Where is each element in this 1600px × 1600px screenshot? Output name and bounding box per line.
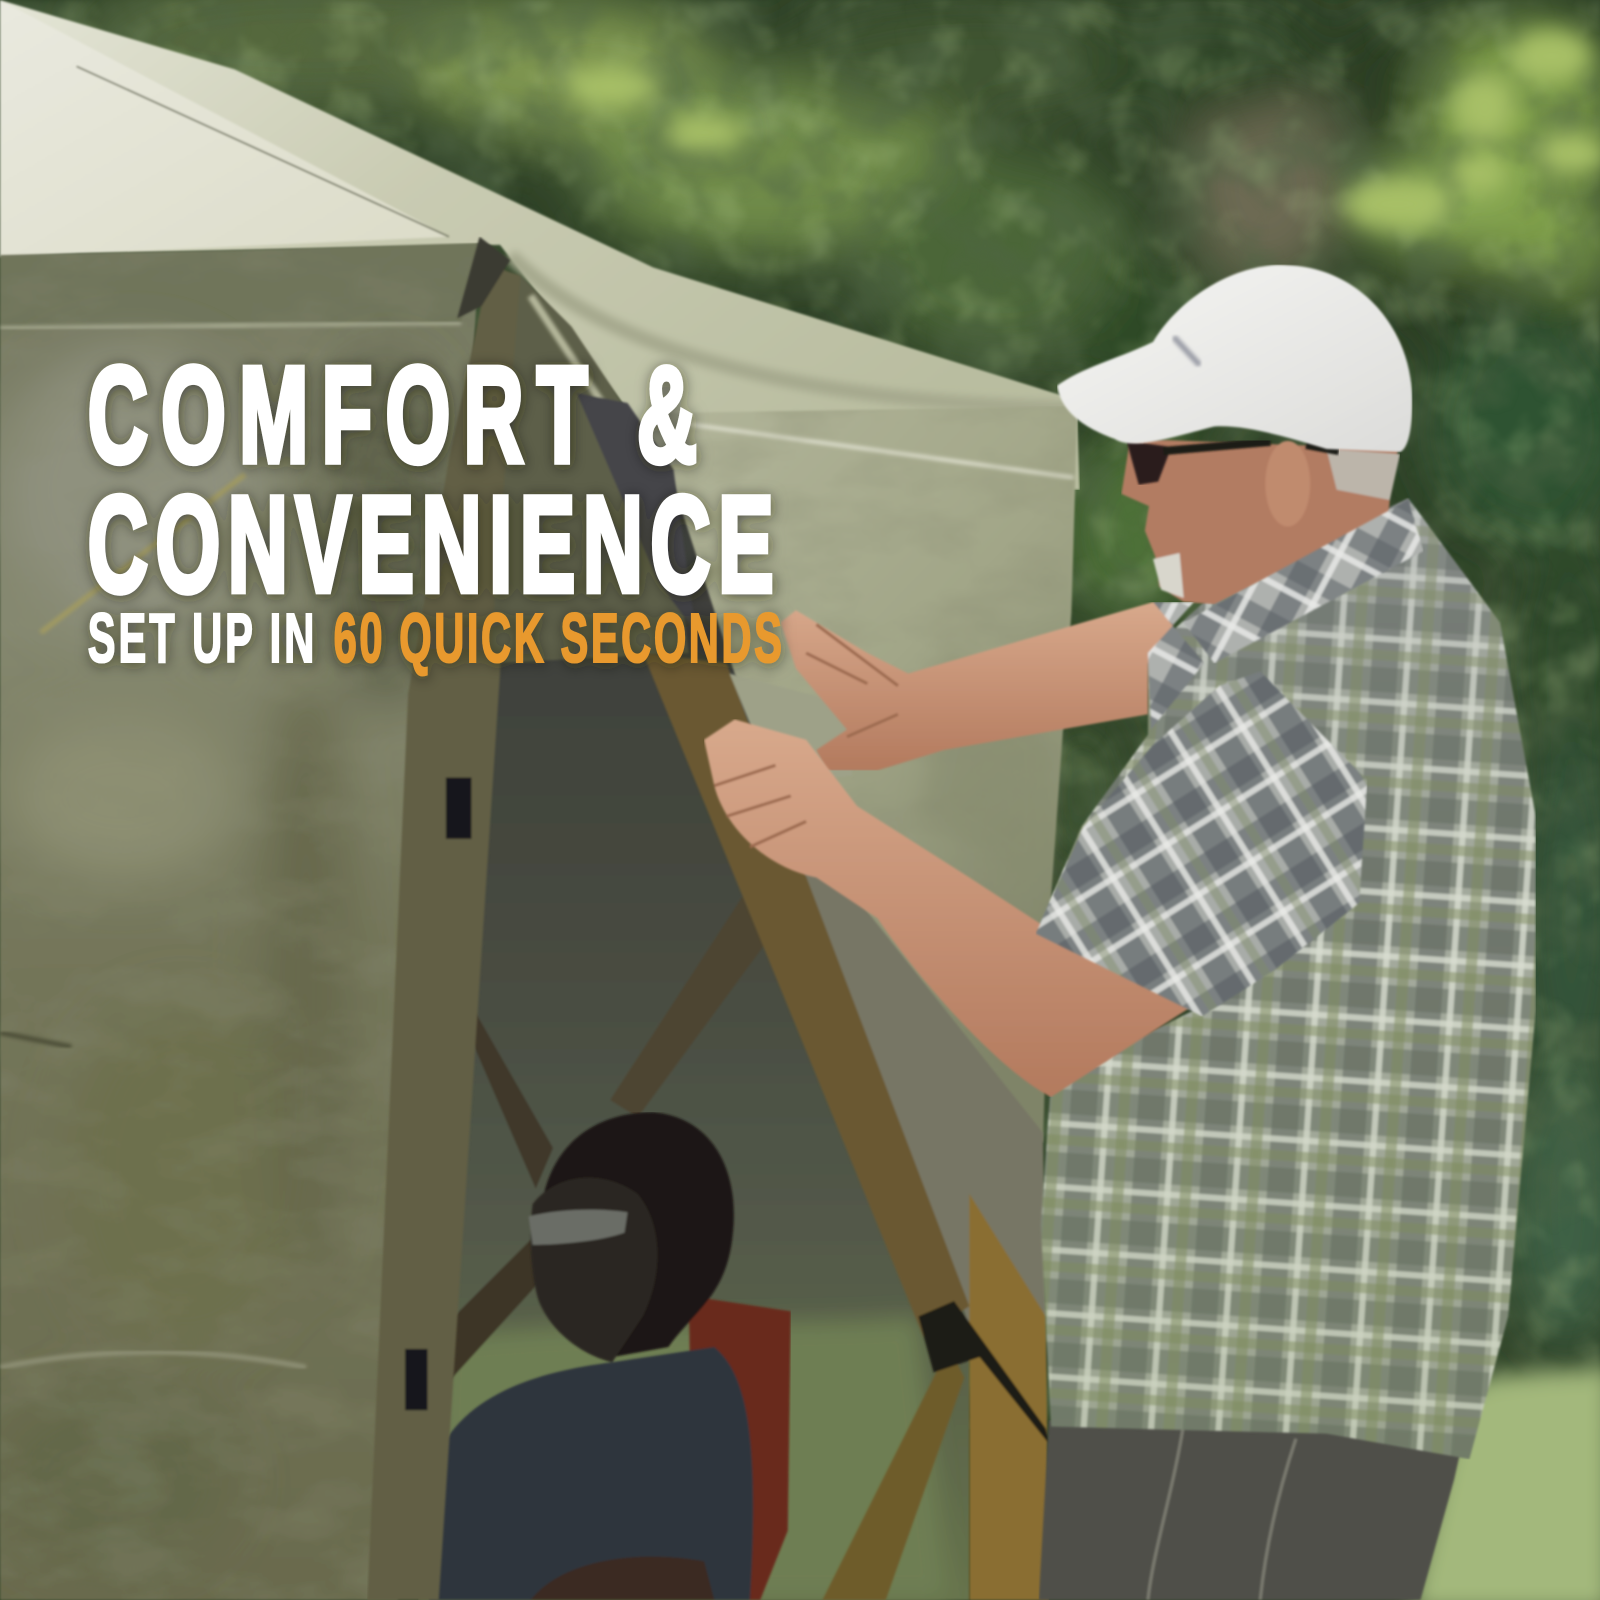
man: shirt torso	[1036, 498, 1536, 1459]
man: trousers	[1039, 1420, 1464, 1600]
title line 2: CONVENIENCE	[88, 467, 774, 620]
man: upper arm and hand	[781, 602, 1204, 770]
seated person silhouette	[429, 1112, 791, 1600]
man: lower arm and hand	[704, 719, 1194, 1097]
background: lawn	[1408, 1367, 1600, 1600]
man: ear	[1265, 441, 1310, 527]
fabric creases	[0, 245, 480, 1600]
leaf highlights	[565, 30, 1600, 231]
man: collar and shoulder	[1184, 500, 1423, 663]
subtitle white: SET UP IN	[88, 600, 314, 678]
tent: left wall	[0, 243, 482, 1600]
frame poles	[439, 896, 765, 1393]
tent: door zipper strip	[367, 237, 696, 1600]
subtitle orange: 60 QUICK SECONDS	[334, 600, 782, 678]
man: neck and head	[1121, 439, 1400, 604]
man: shirt sleeve	[1036, 671, 1367, 1016]
man: white cap	[1057, 265, 1412, 452]
man: sunglasses	[1127, 441, 1339, 485]
tent: right wall	[653, 406, 1078, 1143]
tent: door flap	[643, 653, 1049, 1600]
tent: open doorway interior	[418, 449, 969, 1600]
title line 1: COMFORT &	[88, 337, 697, 491]
headline	[88, 337, 782, 678]
tent: roof	[0, 0, 1080, 490]
